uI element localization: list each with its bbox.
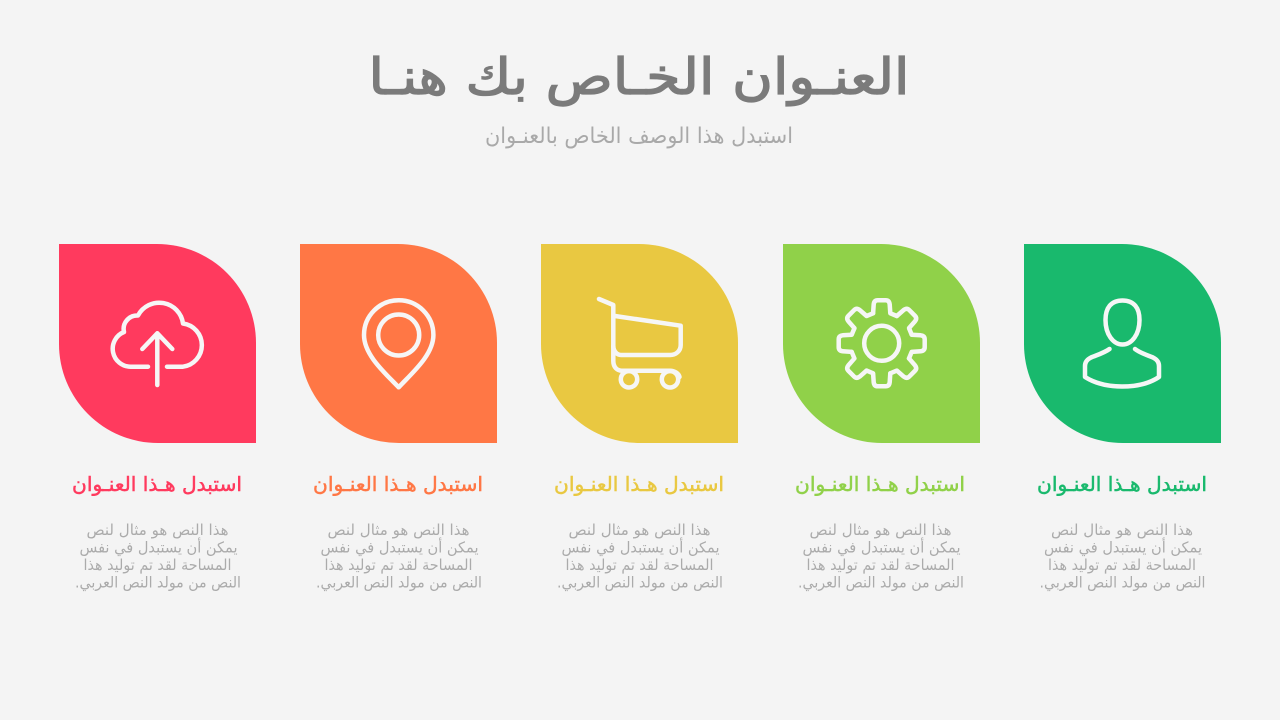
heading: استبدل هـذا العنـوان [72,472,242,496]
body text: النص من مولد النص العربي. [1040,574,1206,592]
icon: gear [839,300,925,386]
heading: استبدل هـذا العنـوان [1037,472,1207,496]
title: العنـوان الخـاص بك هنـا [368,48,910,106]
card shape [59,244,256,443]
card shape [783,244,980,443]
panel: upload (red) [59,244,256,592]
icon: shopping cart [599,299,681,388]
body text: يمكن أن يستبدل في نفس [802,538,960,558]
body text: يمكن أن يستبدل في نفس [1044,538,1202,558]
body text: هذا النص هو مثال لنص [810,521,952,539]
card shape [541,244,738,443]
body text: هذا النص هو مثال لنص [328,521,470,539]
body text [1040,521,1206,592]
body text [557,521,723,592]
body text: النص من مولد النص العربي. [75,574,241,592]
heading: استبدل هـذا العنـوان [554,472,724,496]
body text: المساحة لقد تم توليد هذا [324,556,472,574]
body text: هذا النص هو مثال لنص [1051,521,1193,539]
icon: map pin [364,300,433,387]
body text: النص من مولد النص العربي. [557,574,723,592]
panel: cart (yellow) [541,244,738,592]
body text [798,521,964,592]
heading: استبدل هـذا العنـوان [795,472,965,496]
panel: settings (lime) [783,244,980,592]
body text: النص من مولد النص العربي. [798,574,964,592]
body text: المساحة لقد تم توليد هذا [566,556,714,574]
body text: المساحة لقد تم توليد هذا [84,556,232,574]
heading: استبدل هـذا العنـوان [313,472,483,496]
body text: المساحة لقد تم توليد هذا [806,556,954,574]
panel: user (green) [1024,244,1221,592]
card shape [1024,244,1221,443]
body text: المساحة لقد تم توليد هذا [1048,556,1196,574]
body text: النص من مولد النص العربي. [316,574,482,592]
body text: هذا النص هو مثال لنص [568,521,711,539]
icon: cloud upload [113,303,202,385]
body text: يمكن أن يستبدل في نفس [562,538,720,558]
body text: هذا النص هو مثال لنص [86,521,229,539]
body text: يمكن أن يستبدل في نفس [80,538,238,558]
icon: user [1085,300,1159,386]
body text [316,521,482,592]
panel: location (orange) [300,244,497,592]
subtitle: استبدل هذا الوصف الخاص بالعنـوان [485,124,793,149]
body text [75,521,241,592]
body text: يمكن أن يستبدل في نفس [320,538,478,558]
card shape [300,244,497,443]
